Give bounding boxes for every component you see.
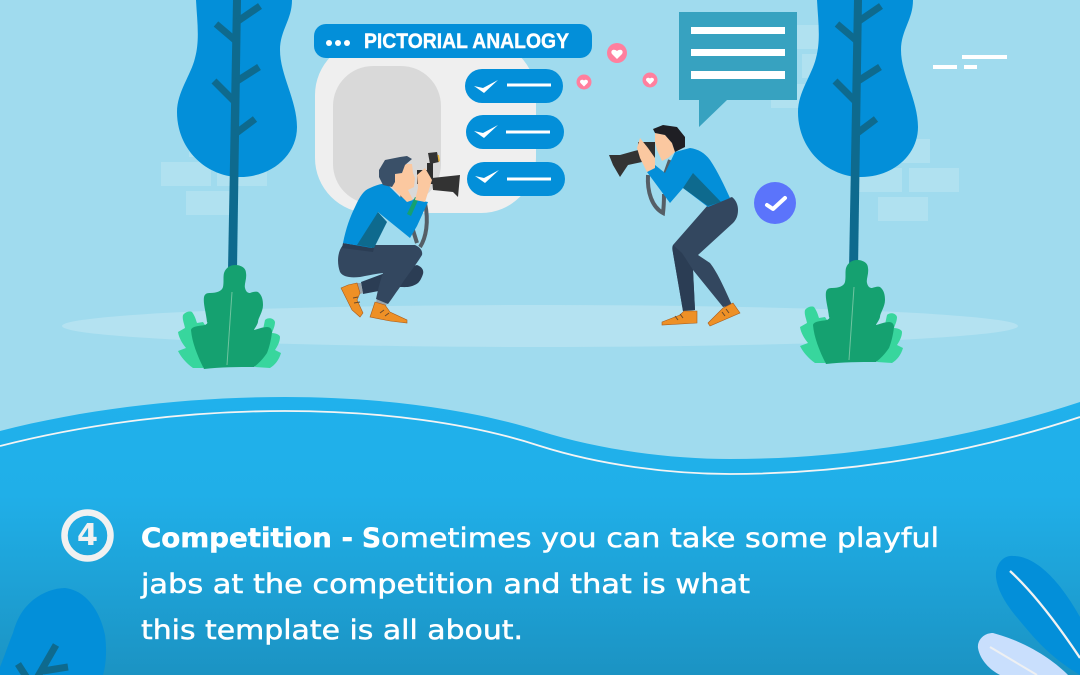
front leg	[338, 245, 422, 304]
tree left	[177, 0, 297, 270]
icon: heart small right	[642, 72, 658, 88]
body text: this template is all about.	[141, 615, 523, 646]
belt	[342, 243, 374, 252]
shoes	[662, 311, 697, 325]
photographer crouching	[338, 152, 460, 323]
shirt	[343, 184, 428, 248]
body text: jabs at the competition and that is what	[140, 569, 750, 600]
ground ellipse	[62, 305, 1018, 347]
camera strap	[402, 195, 427, 247]
panel: pictorial analogy card	[315, 40, 536, 213]
hand	[637, 138, 655, 172]
body text: Competition -	[141, 523, 353, 554]
checklist pill 1	[465, 69, 563, 103]
socks	[357, 283, 387, 306]
camera	[427, 163, 433, 172]
tree right	[798, 0, 918, 270]
shoes	[341, 283, 363, 317]
body text: ometimes you can take some playful	[381, 523, 939, 554]
image placeholder	[333, 66, 441, 204]
speech bubble	[679, 12, 797, 127]
plant right	[800, 260, 903, 364]
laces	[675, 309, 729, 320]
shirt	[647, 148, 730, 207]
body text	[140, 523, 939, 646]
icon: blue check badge	[754, 182, 796, 224]
head	[392, 164, 415, 202]
checklist pill 2	[466, 115, 564, 149]
heading bar: pictorial analogy: PICTORIAL ANALOGY	[364, 30, 569, 53]
number badge 4	[64, 512, 110, 558]
checklist pill 3	[467, 162, 565, 196]
plant left	[178, 265, 281, 369]
icon: heart large	[607, 43, 627, 63]
wave panel	[0, 397, 1080, 675]
hand	[415, 168, 432, 202]
wave white line	[0, 411, 1080, 474]
camera	[609, 150, 642, 177]
legs	[672, 197, 738, 311]
number badge 4: 4	[77, 518, 98, 553]
leaf bottom right light	[978, 633, 1068, 675]
icon: heart small left	[576, 74, 592, 90]
photographer standing	[609, 125, 740, 326]
heading bar: pictorial analogy	[314, 24, 592, 58]
body text: S	[362, 523, 381, 554]
back leg	[361, 265, 423, 294]
leaf bottom left	[0, 588, 106, 675]
head	[655, 133, 675, 161]
leaf bottom right dark	[996, 556, 1080, 675]
background bricks	[161, 25, 959, 221]
white dashes	[933, 55, 1007, 69]
laces	[353, 297, 389, 316]
camera strap	[648, 160, 670, 213]
